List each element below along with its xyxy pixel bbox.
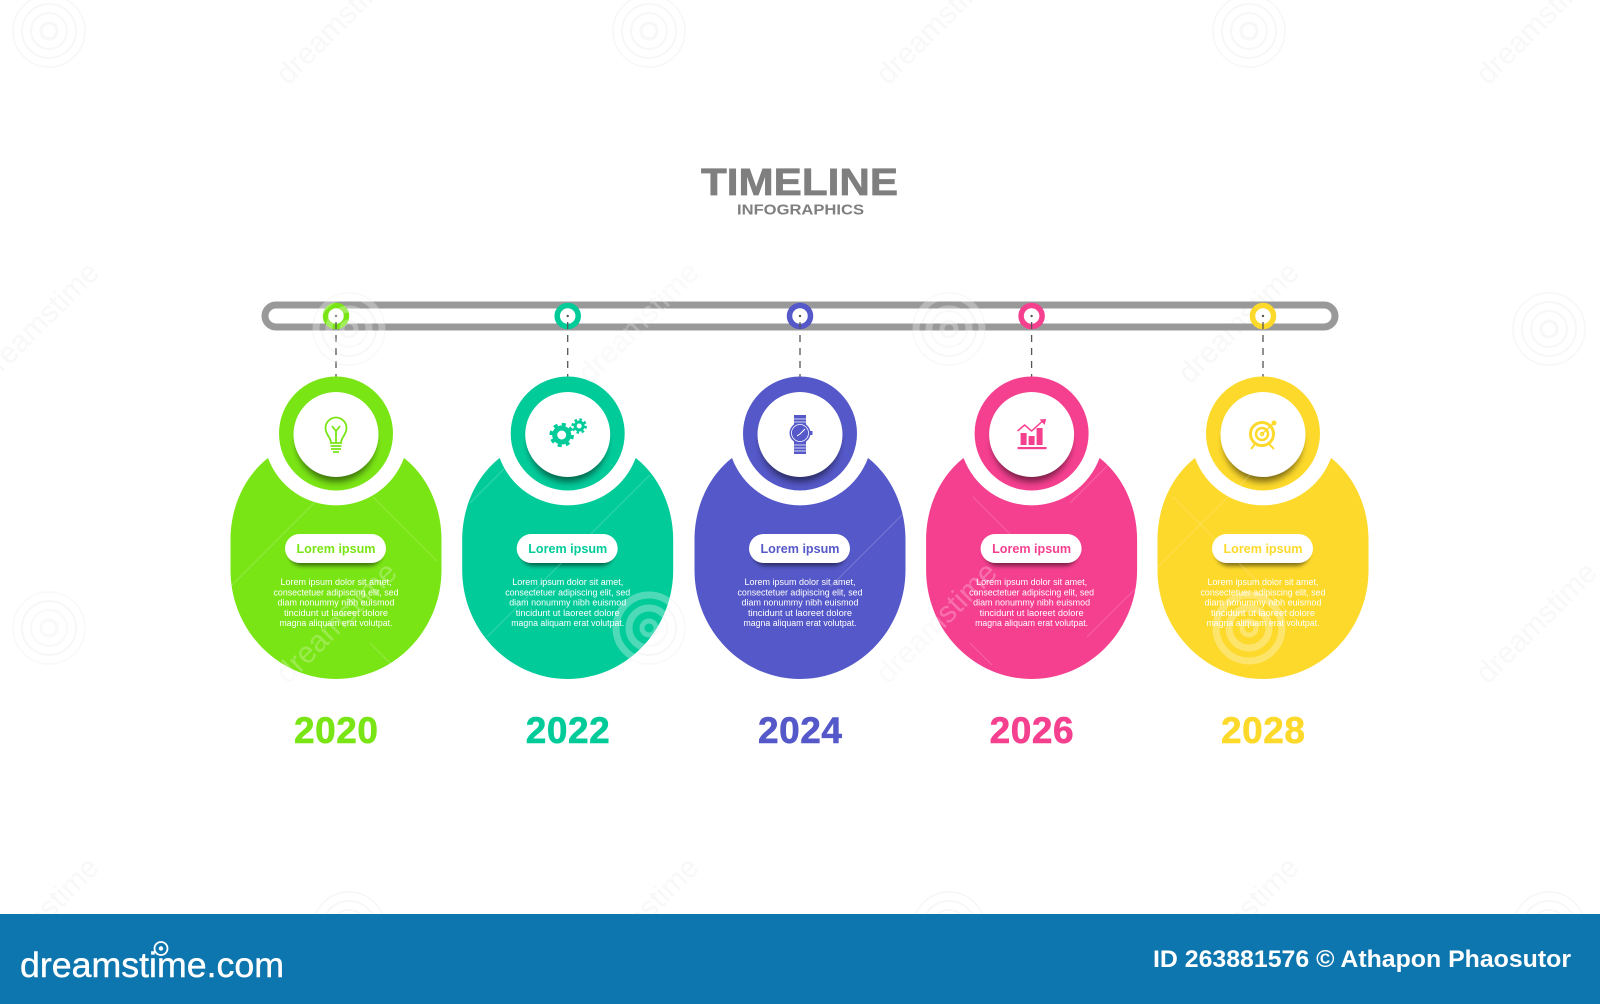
description 2022: tincidunt ut laoreet dolore	[516, 608, 620, 619]
title	[701, 162, 898, 219]
footer logo: dreamstime.com	[20, 946, 284, 985]
description 2022: diam nonummy nibh euismod	[509, 598, 626, 609]
icon ring 2022	[511, 376, 625, 490]
timeline node 2020	[326, 306, 346, 386]
heading: timeline: TIMELINE	[701, 162, 898, 204]
timeline node 2024	[790, 306, 810, 386]
description 2028	[1200, 577, 1326, 629]
panel body 2028	[1158, 458, 1368, 679]
year 2026: 2026	[990, 710, 1074, 751]
description 2024: Lorem ipsum dolor sit amet,	[744, 577, 856, 588]
description 2020: consectetuer adipiscing elit, sed	[274, 587, 398, 598]
icon: gears	[551, 420, 586, 446]
label pill 2022: Lorem ipsum	[528, 542, 607, 556]
panel body 2022	[462, 458, 673, 679]
description 2028: diam nonummy nibh euismod	[1204, 598, 1322, 609]
footer bar	[0, 914, 1600, 1004]
description 2028: consectetuer adipiscing elit, sed	[1200, 587, 1326, 598]
label pill 2022	[517, 534, 618, 566]
description 2020: tincidunt ut laoreet dolore	[284, 608, 388, 619]
description 2022: consectetuer adipiscing elit, sed	[505, 587, 630, 598]
icon: wristwatch	[790, 415, 812, 454]
background watermark: dreamstime	[572, 851, 706, 985]
description 2020: Lorem ipsum dolor sit amet,	[280, 577, 392, 588]
description 2020: magna aliquam erat volutpat.	[280, 618, 392, 629]
description 2026: consectetuer adipiscing elit, sed	[969, 587, 1094, 598]
description 2026: diam nonummy nibh euismod	[973, 598, 1090, 609]
label pill 2020: Lorem ipsum	[296, 542, 376, 556]
year 2020: 2020	[294, 710, 378, 751]
background watermark: dreamstime	[1470, 556, 1600, 690]
panel body 2026	[926, 458, 1137, 679]
label pill 2028: Lorem ipsum	[1224, 542, 1302, 556]
foreground watermark: dreamstime	[270, 556, 404, 690]
background watermark: dreamstime	[572, 256, 706, 390]
description 2020	[274, 577, 398, 629]
panel body 2020	[230, 458, 442, 679]
description 2024	[738, 577, 862, 629]
timeline node 2028	[1252, 306, 1274, 386]
foreground watermark: dreamstime	[870, 556, 1004, 690]
column 2020	[230, 306, 442, 751]
description 2020: diam nonummy nibh euismod	[278, 598, 394, 609]
description 2026: Lorem ipsum dolor sit amet,	[976, 577, 1087, 588]
label pill 2028	[1212, 534, 1313, 566]
column 2022	[462, 306, 673, 751]
description 2022: Lorem ipsum dolor sit amet,	[512, 577, 623, 588]
icon ring 2028	[1206, 376, 1320, 490]
foreground watermark: dreamstime	[572, 256, 706, 390]
year 2022: 2022	[526, 710, 610, 751]
description 2024: tincidunt ut laoreet dolore	[748, 608, 852, 619]
foreground watermark	[16, 256, 1520, 690]
icon: target with arrow	[1250, 421, 1276, 449]
icon ring 2024	[743, 376, 857, 490]
label pill 2026: Lorem ipsum	[992, 542, 1071, 556]
timeline node 2026	[1021, 306, 1042, 386]
timeline bar	[265, 305, 1335, 327]
description 2026	[969, 577, 1094, 629]
label pill 2024	[749, 534, 850, 566]
description 2022: magna aliquam erat volutpat.	[511, 618, 624, 629]
label pill 2020	[285, 534, 386, 566]
timeline node 2022	[557, 306, 578, 386]
label pill 2024: Lorem ipsum	[760, 542, 840, 556]
description 2024: diam nonummy nibh euismod	[742, 598, 858, 609]
background watermark: dreamstime	[270, 556, 404, 690]
description 2026: magna aliquam erat volutpat.	[975, 618, 1088, 629]
description 2024: consectetuer adipiscing elit, sed	[738, 587, 862, 598]
year 2024: 2024	[758, 710, 842, 751]
label pill 2026	[981, 534, 1082, 566]
panel body 2024	[694, 458, 906, 679]
column 2026	[926, 306, 1137, 751]
description 2026: tincidunt ut laoreet dolore	[980, 608, 1084, 619]
description 2028: Lorem ipsum dolor sit amet,	[1208, 577, 1318, 588]
subheading: infographics: INFOGRAPHICS	[737, 202, 864, 219]
year 2028: 2028	[1221, 710, 1305, 751]
background watermark: dreamstime	[870, 556, 1004, 690]
description 2024: magna aliquam erat volutpat.	[744, 618, 856, 629]
column 2028	[1158, 306, 1368, 751]
column 2024	[694, 306, 906, 751]
background watermark: dreamstime	[1172, 256, 1306, 390]
background watermark: dreamstime	[1172, 851, 1306, 985]
description 2022	[505, 577, 630, 629]
icon: rising bar chart	[1018, 419, 1047, 449]
footer credit: ID 263881576 © Athapon Phaosutor	[1153, 946, 1571, 973]
icon: light bulb	[326, 418, 346, 452]
icon ring 2026	[975, 376, 1089, 490]
description 2028: magna aliquam erat volutpat.	[1206, 618, 1320, 629]
icon ring 2020	[279, 376, 393, 490]
description 2028: tincidunt ut laoreet dolore	[1211, 608, 1315, 619]
